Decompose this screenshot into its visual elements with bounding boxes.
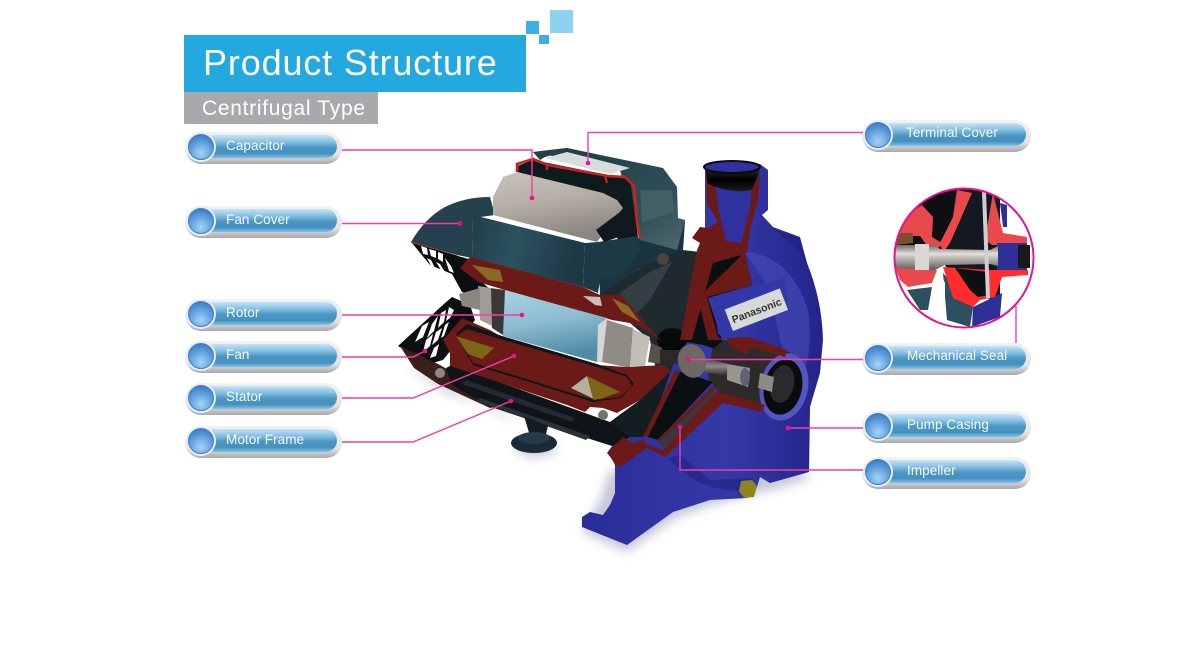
callout: Stator: Stator: [226, 389, 263, 404]
callout: Motor Frame: Motor Frame: [226, 432, 304, 447]
subtitle: Centrifugal Type: [202, 97, 366, 120]
fan grille lower: [398, 297, 475, 365]
stator: [443, 318, 670, 420]
callout: Rotor: Rotor: [226, 305, 260, 320]
pump drop shadow: [405, 365, 812, 552]
inlet black ring: [704, 161, 760, 191]
fan grille upper: [412, 243, 498, 300]
decorative squares: [526, 10, 573, 44]
rotor: [459, 286, 650, 368]
callout: Fan: [185, 341, 427, 373]
capacitor: [493, 172, 623, 242]
callout: Terminal Cover: Terminal Cover: [906, 125, 998, 140]
impeller: [658, 388, 718, 448]
callout: Fan Cover: Fan Cover: [226, 212, 290, 227]
callout: Fan: Fan: [226, 347, 250, 362]
callout: Fan Cover: [185, 206, 462, 238]
motor charcoal body: [598, 218, 700, 437]
callout: Impeller: [678, 425, 1031, 489]
callout: Stator: [185, 354, 516, 415]
black space behind impeller: [648, 370, 713, 440]
callout: Capacitor: [185, 132, 534, 200]
pump casing cutaway red: [608, 174, 787, 467]
title: Product Structure: [203, 42, 498, 83]
subtitle: [184, 92, 378, 124]
drain plug: [739, 480, 757, 498]
callout: Mechanical Seal: Mechanical Seal: [907, 348, 1007, 363]
pump outlet hole: [753, 349, 815, 425]
dark interior of casing: [686, 250, 790, 408]
illustration: cutaway centrifugal pump: [398, 148, 823, 552]
brand plate: Panasonic: [730, 296, 784, 326]
callout: Impeller: Impeller: [907, 463, 956, 478]
terminal box: [472, 212, 669, 293]
motor red band top: [460, 257, 662, 342]
fan cover: [411, 197, 495, 258]
callout: Terminal Cover: [586, 120, 1031, 165]
callout: Rotor: [185, 299, 524, 331]
callout: Pump Casing: Pump Casing: [907, 417, 989, 432]
nameplate boss: [713, 278, 788, 338]
detail circle: mechanical seal close-up: [894, 188, 1034, 328]
pump casing blue: [582, 164, 823, 545]
title: [184, 35, 526, 92]
shaft and mechanical seal: [648, 341, 774, 392]
inlet funnel: [717, 186, 752, 243]
callout: Mechanical Seal: [686, 343, 1031, 375]
motor frame bottom: [400, 346, 630, 446]
callout: Capacitor: Capacitor: [226, 138, 285, 153]
leader: detail circle to mechanical seal: [1015, 306, 1017, 343]
callout: Motor Frame: [185, 399, 513, 458]
terminal cover: [517, 148, 685, 250]
callout: Pump Casing: [786, 411, 1031, 443]
adjustable foot: [511, 416, 557, 453]
